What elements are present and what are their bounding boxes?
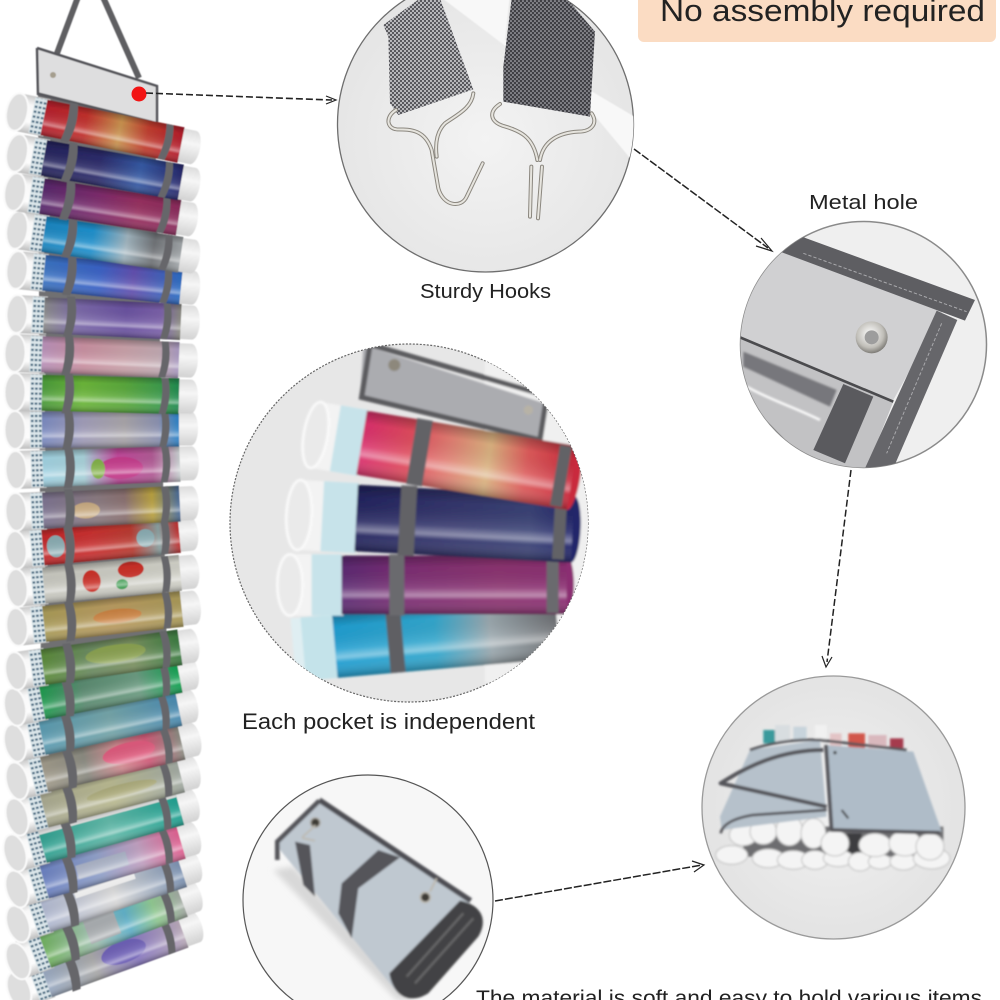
roll 6 — [6, 294, 201, 343]
panel: rolled-up organizer circle — [243, 775, 493, 1000]
roll 16 — [1, 652, 202, 729]
hanger header panel — [37, 48, 157, 122]
shadow — [273, 867, 413, 1000]
pocket strap — [813, 384, 873, 463]
roll 2 — [3, 131, 203, 206]
roll 17 — [0, 685, 202, 765]
roll 5 — [4, 249, 202, 308]
banner: no assembly required — [638, 0, 996, 42]
red marker dot — [132, 86, 146, 102]
left mesh strap — [383, 0, 473, 115]
hanging organizer with rolls — [0, 0, 208, 1000]
roll 8 — [4, 372, 198, 417]
roll: navy — [285, 479, 582, 565]
right mesh strap — [503, 0, 595, 117]
roll: purple — [277, 554, 574, 616]
roll 1 — [3, 90, 204, 169]
top binding — [780, 237, 975, 321]
roll tops sticking out — [763, 725, 903, 750]
wall right side — [485, 340, 598, 683]
roll 14 — [4, 587, 203, 648]
roll 9 — [4, 408, 198, 450]
arrow: metal hole to folded pocket — [822, 470, 851, 667]
straps — [295, 842, 315, 897]
clear pocket — [740, 337, 893, 468]
grommets — [311, 818, 320, 827]
roll 18 — [2, 718, 205, 803]
roll 20 — [0, 783, 204, 875]
left hook — [388, 93, 483, 204]
roll 3 — [1, 171, 201, 240]
roll 15 — [3, 625, 202, 692]
panel: metal hole circle — [740, 222, 986, 468]
panel: folded organizer circle — [702, 676, 965, 939]
roll 19 — [2, 751, 205, 839]
label: metal hole: Metal hole — [809, 192, 918, 214]
roll: cyan — [292, 612, 558, 680]
roll 4 — [4, 209, 203, 277]
back panel of organizer — [38, 92, 172, 985]
roll 7 — [4, 333, 199, 381]
arrow: hooks to metal hole — [634, 149, 772, 251]
shadow behind rolls — [743, 827, 943, 857]
roll 13 — [5, 551, 201, 609]
roll 11 — [5, 483, 200, 533]
roll 23 — [1, 874, 208, 984]
roll: red — [298, 400, 585, 512]
label: sturdy hooks: Sturdy Hooks — [420, 281, 551, 303]
grommets — [833, 751, 837, 754]
light wall wedge — [445, 0, 634, 158]
roll body — [276, 800, 470, 992]
arrow: rolled organizer to folded pocket — [495, 861, 704, 901]
roll 24 — [2, 905, 208, 1000]
right binding — [865, 311, 957, 468]
label: each pocket is independent: Each pocket is independent — [242, 709, 535, 734]
right hook — [492, 104, 594, 218]
metal grommet — [856, 321, 888, 353]
header panel — [360, 345, 545, 442]
end coil — [389, 901, 483, 999]
roll 10 — [5, 443, 200, 490]
panel: sturdy hooks circle — [338, 0, 640, 272]
roll 12 — [4, 513, 200, 571]
panel bindings — [721, 740, 940, 833]
roll 22 — [1, 845, 207, 946]
bindings — [319, 800, 471, 901]
pocket edge — [740, 337, 893, 402]
panel: each pocket circle — [230, 340, 598, 702]
fabric panels — [720, 740, 827, 830]
hanger straps — [56, 0, 139, 78]
roll 21 — [1, 817, 205, 911]
white roll ends — [716, 816, 950, 871]
arrow: dot to hooks — [146, 93, 336, 104]
gray fabric — [740, 252, 943, 400]
